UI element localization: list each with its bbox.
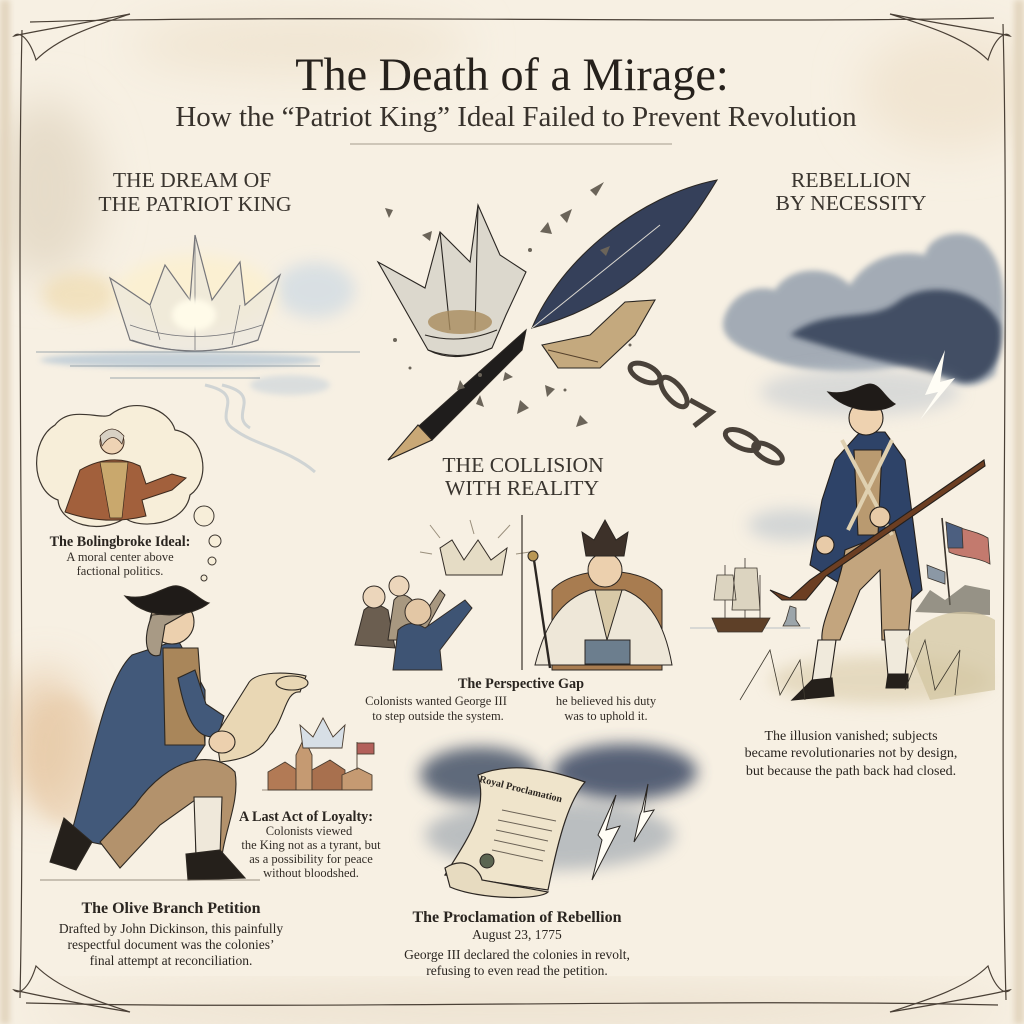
text: a last act of loyalty: the King not as a tyrant, but: [241, 838, 381, 852]
text: the perspective gap: to step outside the system.: [372, 709, 504, 723]
text: the perspective gap: Colonists wanted George III: [365, 694, 507, 708]
text: the perspective gap: [365, 676, 657, 723]
text: the olive branch petition: Drafted by John Dickinson, this painfully: [59, 921, 283, 936]
title: The Death of a Mirage:: [295, 49, 729, 100]
illustration: shattered crown and quill pen: [378, 180, 717, 460]
text: the proclamation of rebellion: refusing to even read the petition.: [426, 963, 608, 978]
illustration: colonists reaching for crown: [355, 520, 530, 670]
illustration: king george iii on throne: [528, 520, 672, 670]
text: the bolingbroke ideal: A moral center above: [66, 550, 174, 564]
illustration: kneeling colonist with petition: [27, 586, 308, 880]
heading: the collision with reality: THE COLLISION: [442, 453, 604, 477]
text: the proclamation of rebellion: August 23, 1775: [472, 927, 562, 942]
illustration: ships at shore and flag: [690, 518, 995, 700]
heading: the dream of the patriot king: THE DREAM OF: [113, 168, 271, 192]
text: the perspective gap: The Perspective Gap: [458, 676, 584, 692]
text: rebellion caption: became revolutionaries not by design,: [745, 746, 957, 761]
icon: village with small crown and flag: [262, 718, 374, 790]
text: rebellion caption: The illusion vanished; subjects: [764, 729, 938, 744]
text: the olive branch petition: [59, 900, 283, 968]
heading: the collision with reality: WITH REALITY: [445, 476, 599, 500]
text: a last act of loyalty: [239, 809, 381, 880]
title: [175, 49, 857, 144]
text: the proclamation of rebellion: [404, 909, 630, 978]
text: the olive branch petition: The Olive Branch Petition: [81, 900, 261, 917]
illustration: storm and royal proclamation: [420, 744, 697, 897]
text: the bolingbroke ideal: [50, 534, 190, 578]
text: a last act of loyalty: without bloodshed.: [263, 866, 359, 880]
text: the proclamation of rebellion: The Proclamation of Rebellion: [412, 909, 622, 926]
text: the perspective gap: he believed his duty: [556, 694, 657, 708]
icon: broken chain: [627, 359, 785, 467]
illustration: storm clouds with lightning: [723, 234, 1004, 541]
text: the perspective gap: was to uphold it.: [564, 709, 648, 723]
text: a last act of loyalty: as a possibility for peace: [249, 852, 373, 866]
thought bubble: bolingbroke figure: [37, 406, 221, 581]
text: the proclamation of rebellion: George III declared the colonies in revolt,: [404, 947, 630, 962]
heading: rebellion by necessity: REBELLION: [791, 168, 911, 192]
text: the olive branch petition: final attempt at reconciliation.: [90, 953, 252, 968]
heading: the dream of the patriot king: [98, 168, 292, 216]
heading: the collision with reality: [442, 453, 604, 500]
divider: [521, 515, 523, 670]
text: the bolingbroke ideal: factional politics.: [77, 564, 163, 578]
text: a last act of loyalty: Colonists viewed: [266, 824, 353, 838]
illustration: colonial soldier with musket: [770, 384, 990, 704]
title: How the “Patriot King” Ideal Failed to Prevent Revolution: [175, 101, 857, 133]
text: the olive branch petition: respectful document was the colonies’: [68, 937, 274, 952]
text: rebellion caption: [745, 729, 957, 779]
text: the bolingbroke ideal: The Bolingbroke Ideal:: [50, 534, 190, 550]
icon: glowing glass crown over water: [36, 235, 360, 472]
heading: rebellion by necessity: [776, 168, 927, 215]
heading: rebellion by necessity: BY NECESSITY: [776, 191, 927, 215]
heading: the dream of the patriot king: THE PATRIOT KING: [98, 192, 292, 216]
text: rebellion caption: but because the path back had closed.: [746, 764, 956, 779]
text: a last act of loyalty: A Last Act of Loyalty:: [239, 809, 373, 825]
illustration: storm and royal proclamation: Royal Proclamation: [478, 774, 564, 805]
